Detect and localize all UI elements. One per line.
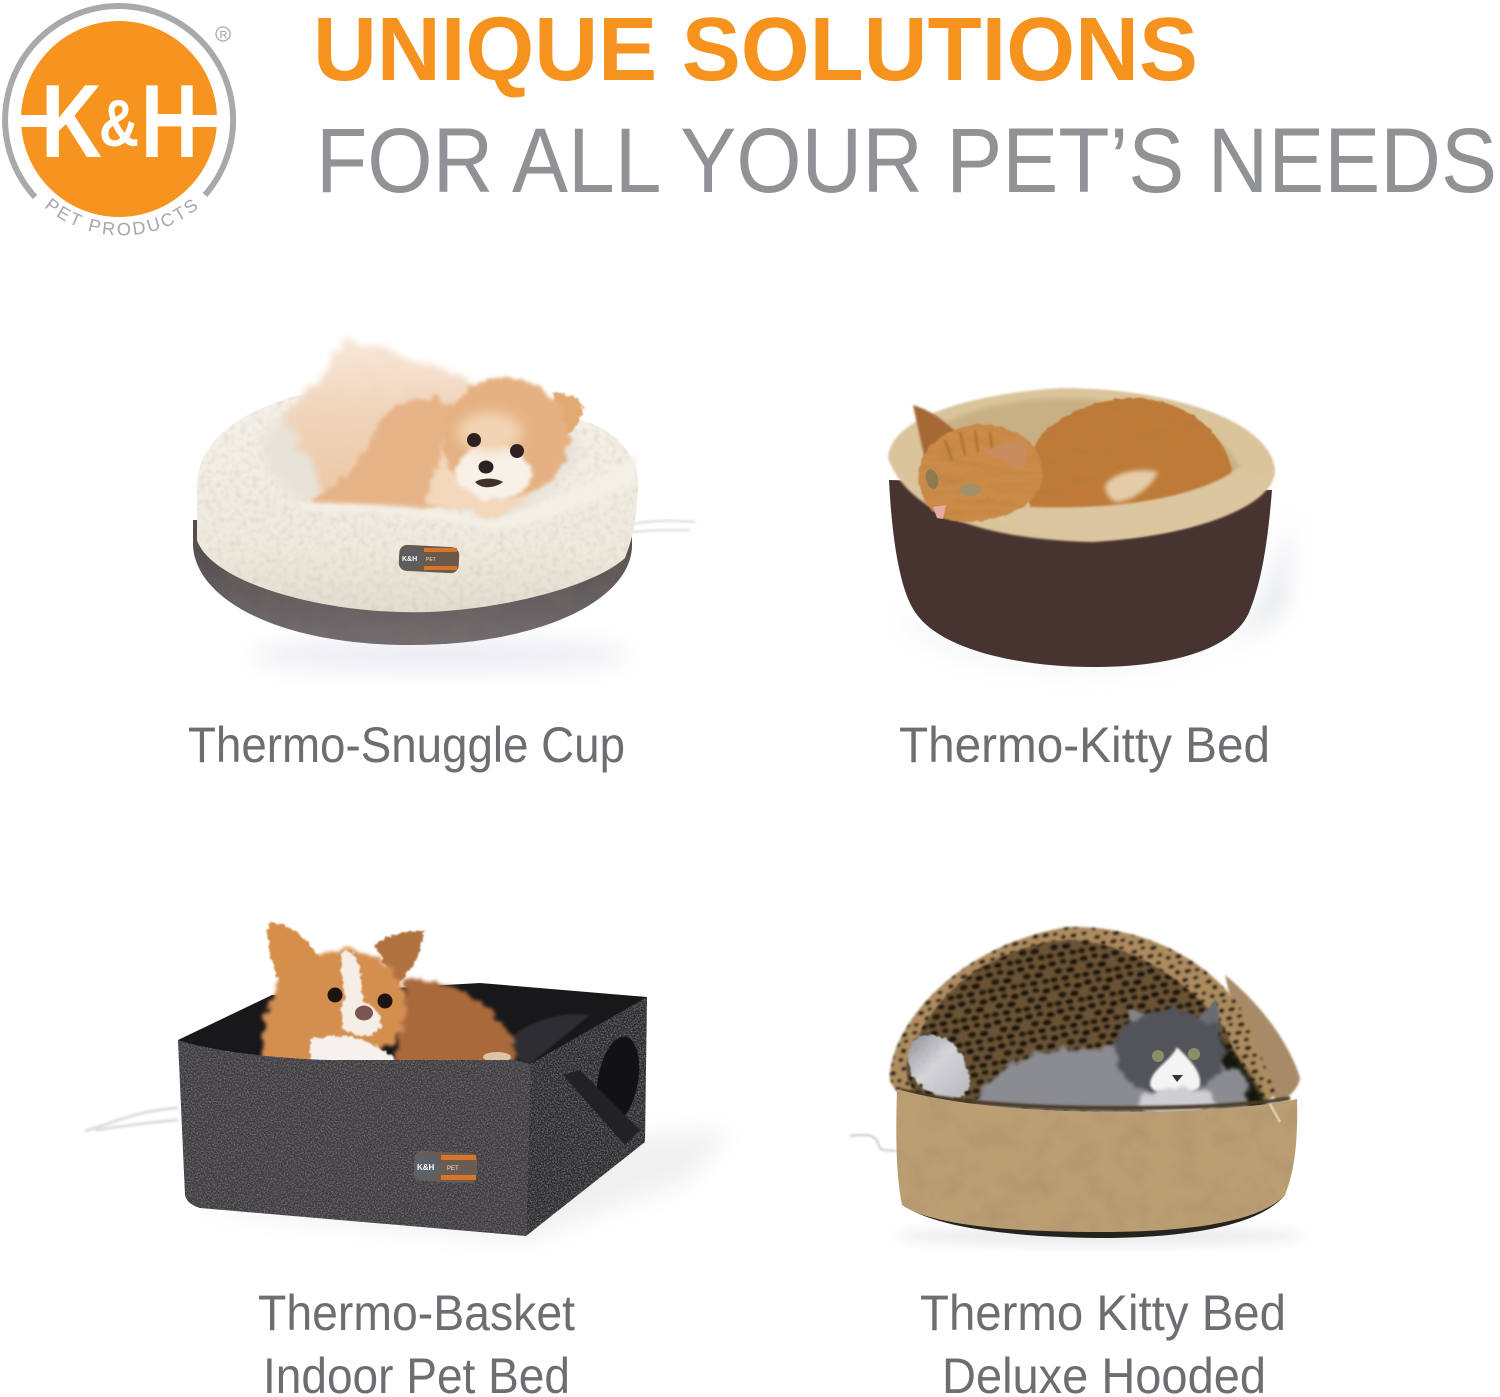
logo: K&H Pet Products: & <box>99 86 139 160</box>
product: Thermo-Basket Indoor Pet Bed <box>85 923 730 1240</box>
icon: tan rim <box>888 388 1275 542</box>
logo: K&H Pet Products: PET PRODUCTS <box>45 198 197 236</box>
icon: fleece bed <box>197 395 638 612</box>
icon: cat tail <box>908 1035 970 1098</box>
icon: zipper <box>1270 1104 1280 1122</box>
icon: floor shadow <box>250 639 630 671</box>
label: Thermo-Basket: Thermo-Basket <box>258 1285 575 1341</box>
icon: brand badge: K&H <box>402 556 417 563</box>
icon: brand badge: PET <box>447 1166 459 1172</box>
product: Thermo-Kitty Bed <box>888 388 1290 667</box>
logo: K&H Pet Products: R <box>220 30 228 42</box>
icon: dog body <box>395 979 514 1066</box>
icon: bed interior <box>262 400 585 520</box>
logo: K&H Pet Products: K <box>41 64 102 180</box>
label: Thermo Kitty Bed: Thermo Kitty Bed <box>920 1285 1286 1341</box>
icon: dog head <box>262 923 424 1066</box>
icon: power cord <box>630 521 696 532</box>
icon: cat body <box>1028 398 1232 512</box>
product: Thermo Kitty Bed Deluxe Hooded <box>850 927 1305 1246</box>
product: Thermo-Snuggle Cup <box>193 338 696 671</box>
icon: dog body <box>305 398 462 512</box>
icon: floor shadow <box>200 1130 730 1240</box>
icon: floor shadow <box>905 520 1290 665</box>
logo: K&H Pet Products: H <box>141 64 198 180</box>
icon: brand badge <box>398 544 460 574</box>
icon: brown outer shell <box>889 480 1272 667</box>
icon: cat white patch <box>1105 470 1158 502</box>
icon: hood inner <box>906 940 1262 1112</box>
icon: brand badge: PET <box>426 557 436 563</box>
icon: cat body <box>972 1040 1250 1112</box>
icon: power cord <box>85 1108 178 1131</box>
icon: basket right side <box>526 997 647 1236</box>
icon: brand badge <box>413 1150 478 1184</box>
icon: dog head <box>442 378 583 500</box>
logo: K&H Pet Products <box>2 3 236 236</box>
icon: front rim highlight <box>300 455 636 530</box>
icon: hood outer leopard <box>890 927 1276 1105</box>
label: Thermo-Kitty Bed: Thermo-Kitty Bed <box>899 717 1270 773</box>
label: Thermo-Snuggle Cup: Thermo-Snuggle Cup <box>188 717 625 773</box>
icon: front rim band <box>1000 468 1270 540</box>
icon: power cord <box>850 1135 896 1151</box>
icon: rim inner <box>925 398 1240 507</box>
icon: tan base <box>896 1089 1297 1232</box>
icon: basket interior <box>178 983 647 1075</box>
icon: hood taupe flap <box>1225 975 1300 1102</box>
icon: basket front panel <box>178 1040 531 1236</box>
icon: floor shadow <box>895 1226 1305 1246</box>
title: Unique Solutions: UNIQUE SOLUTIONS <box>313 0 1198 100</box>
icon: dark underside <box>903 1195 1285 1238</box>
icon: cat head <box>1115 998 1225 1116</box>
icon: dog tail <box>284 338 478 500</box>
icon: leopard rim stripe <box>900 1090 1290 1108</box>
icon: grey base <box>193 520 632 645</box>
icon: cat head <box>913 405 1043 522</box>
icon: brand badge: K&H <box>417 1163 435 1172</box>
